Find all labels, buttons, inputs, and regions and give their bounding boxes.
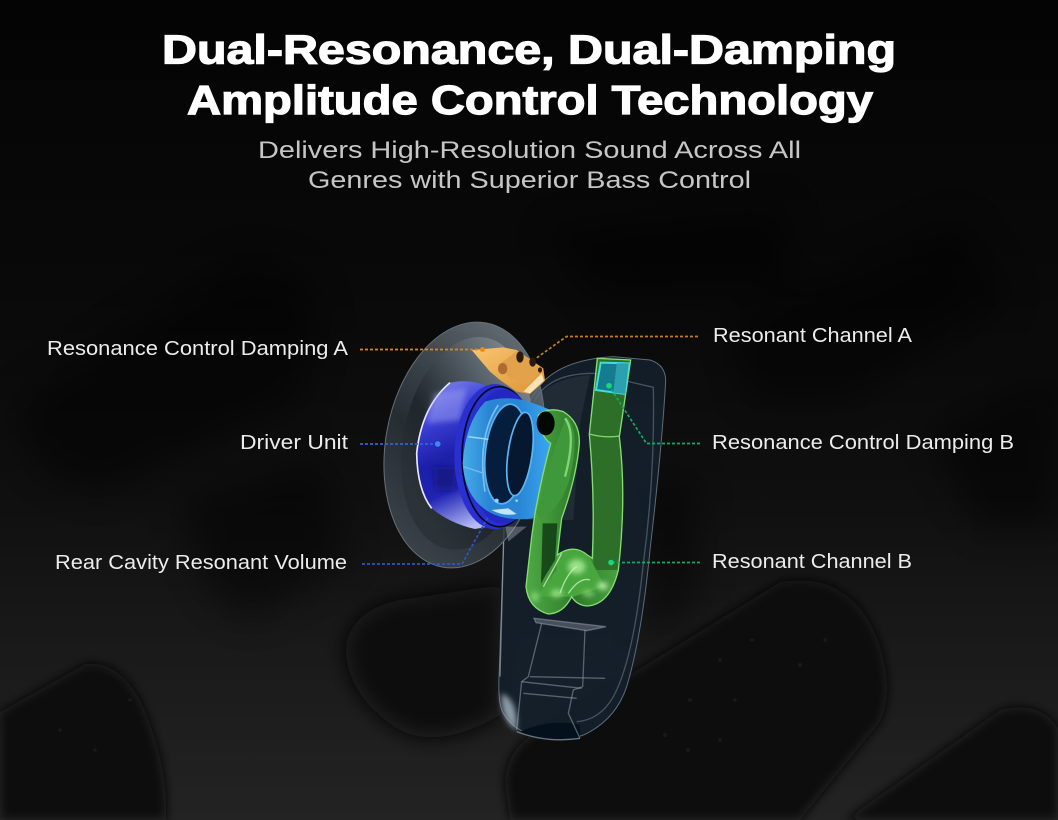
resonance control damping A part [472,347,545,394]
callout labels [47,324,1014,574]
subtitle [258,137,801,194]
title [162,26,896,123]
rear cavity resonant volume [463,398,551,519]
driver unit [417,381,538,529]
leader: rear cavity resonant volume [362,517,488,564]
title: Amplitude Control Technology [187,77,874,123]
earbud cutaway illustration [365,309,666,740]
callout labels: Resonance Control Damping A [47,337,348,360]
callout labels: Resonance Control Damping B [712,431,1014,454]
callout labels: Resonant Channel A [713,324,912,347]
resonant channel B [520,353,633,617]
internal components [517,618,606,738]
ear tip [365,309,563,581]
subtitle: Genres with Superior Bass Control [308,167,751,194]
leader: resonance control damping B [606,383,700,444]
callout labels: Driver Unit [240,431,348,454]
leader: driver unit [360,441,441,447]
callout labels: Rear Cavity Resonant Volume [55,551,347,574]
callout labels: Resonant Channel B [712,550,912,573]
blurred earbuds backdrop [0,205,1058,820]
stem shell [499,357,666,740]
title: Dual-Resonance, Dual-Damping [162,26,896,72]
leader: resonant channel A [536,336,698,358]
leader: resonance control damping A [360,347,485,352]
subtitle: Delivers High-Resolution Sound Across All [258,137,801,164]
leader: resonant channel B [608,560,700,565]
resonance control damping B part [596,363,629,394]
leader lines and anchor dots [360,336,700,565]
